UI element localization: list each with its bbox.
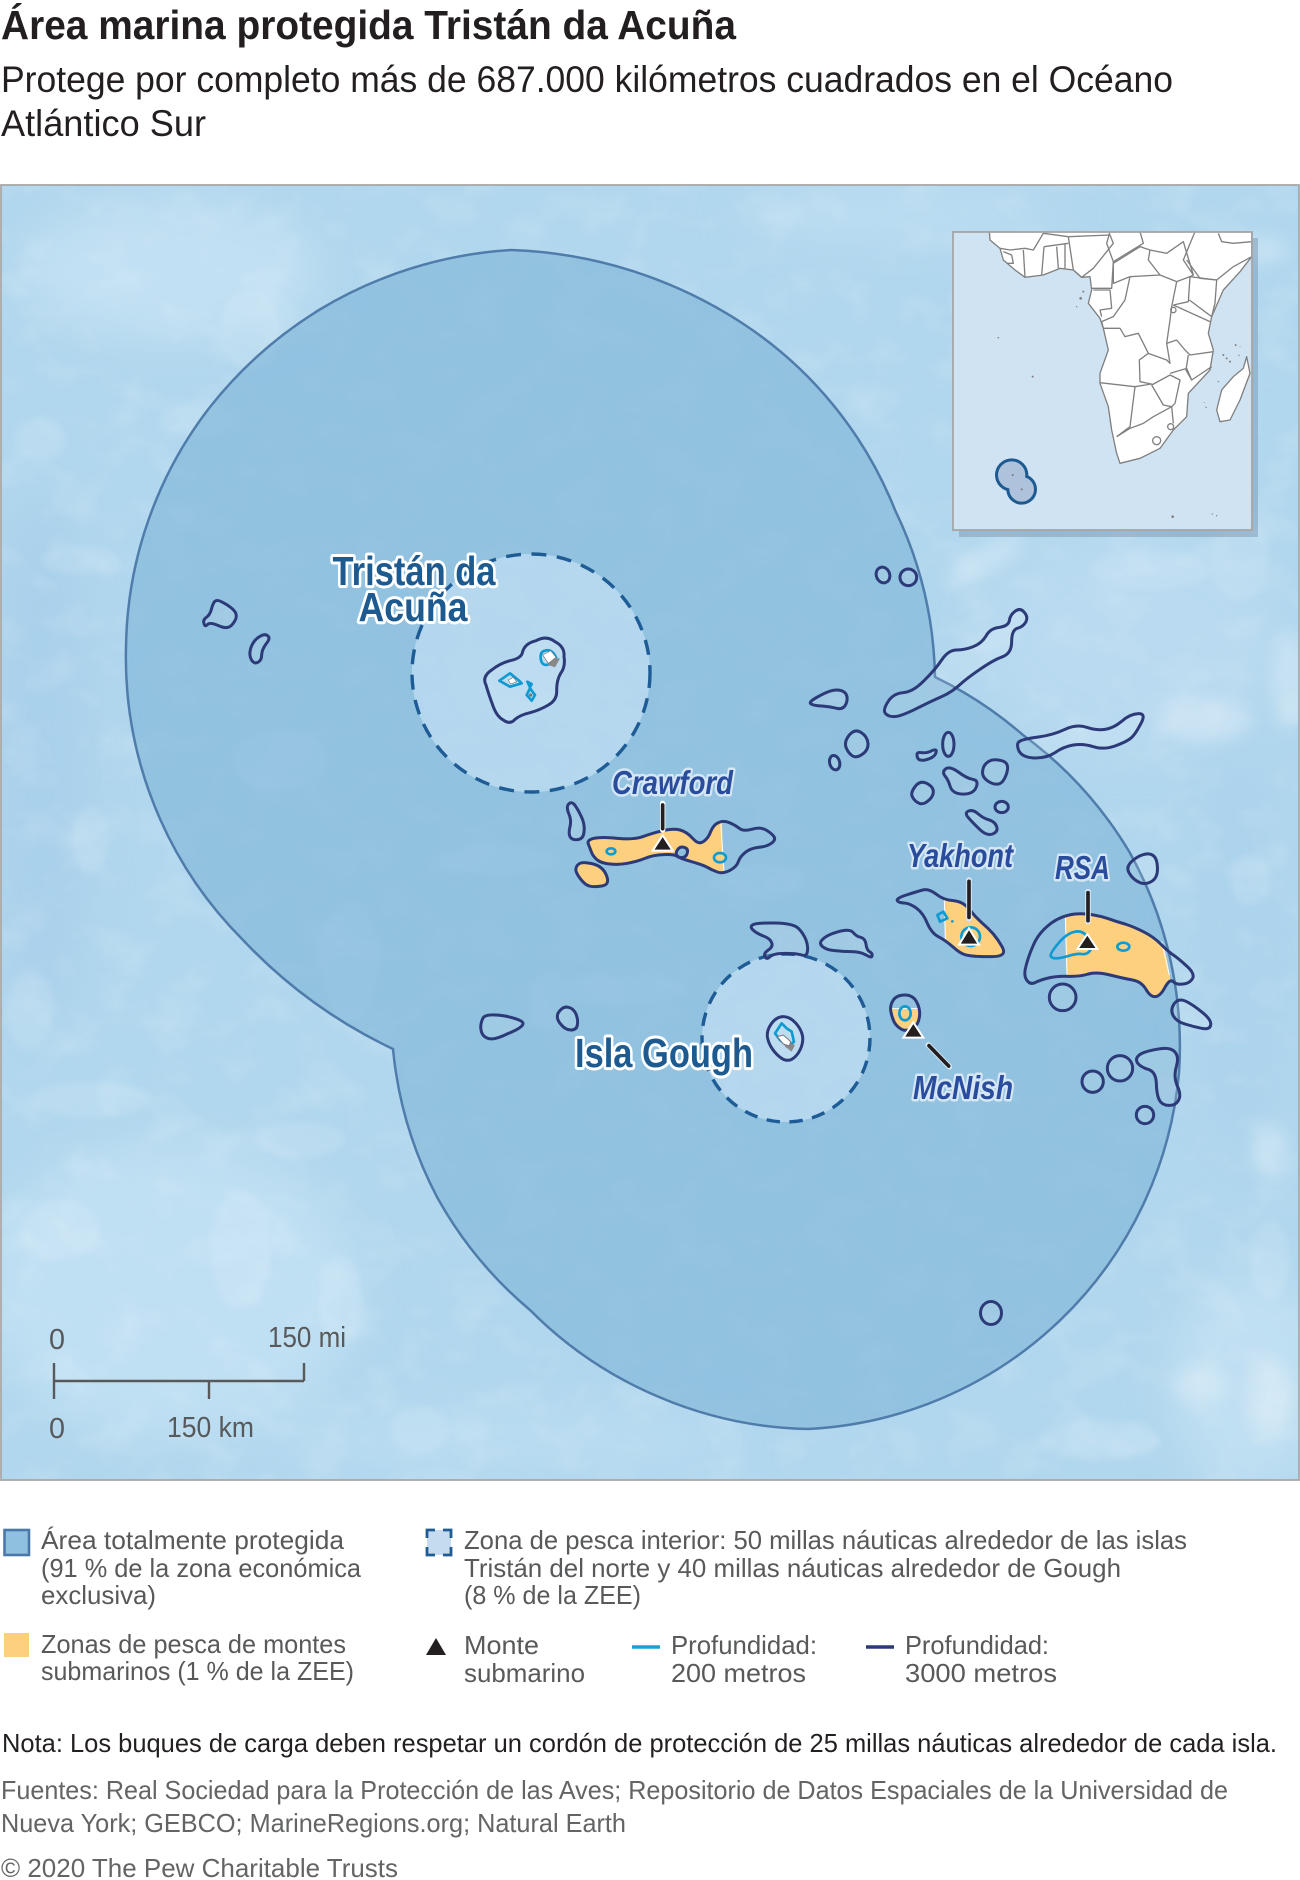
scale bar: 0: [49, 1413, 65, 1445]
legend: [4, 1525, 1187, 1688]
country borders: [1000, 232, 1252, 445]
legend: seamount: Monte: [464, 1630, 539, 1660]
inner fishing zone: Tristan: [412, 554, 650, 792]
legend: fully protected area: Área totalmente protegida: [41, 1525, 345, 1555]
legend: seamount: [426, 1630, 585, 1688]
Tristan da Cunha protected area on inset: [995, 458, 1037, 505]
legend: seamount: submarino: [464, 1658, 585, 1688]
Africa: [989, 232, 1252, 463]
legend: interior fishing zone: Tristán del norte y 40 millas náuticas alrededor de Gough: [464, 1553, 1121, 1583]
seamount marker: RSA: [1077, 892, 1097, 949]
inner fishing zone: Gough: [702, 954, 870, 1122]
Madagascar: [1217, 357, 1250, 422]
inset locator map: [953, 232, 1258, 537]
title: Área marina protegida Tristán da Acuña: [1, 2, 737, 48]
legend: fully protected area: (91 % de la zona económica: [41, 1553, 362, 1583]
scale bar: 150 km: [167, 1412, 254, 1444]
label: Tristán da Acuña: [332, 548, 497, 630]
scale bar: 150 mi: [268, 1322, 346, 1354]
label: Tristán da Acuña: Acuña: [358, 584, 469, 630]
note: Nota: Los buques de carga deben respetar un cordón de protección de 25 millas náuticas alrededor de cada isla.: [2, 1728, 1277, 1758]
label: Isla Gough: Isla Gough: [575, 1030, 753, 1076]
legend: fully protected area: [4, 1525, 362, 1610]
legend: seamount fishing zones: Zonas de pesca de montes: [41, 1629, 346, 1659]
legend: depth 3000 metres: 3000 metros: [905, 1658, 1057, 1688]
seamount marker: Yakhont: [959, 880, 979, 945]
sources: [1, 1775, 1228, 1838]
seamount: far western: [481, 1015, 523, 1039]
scale bar: [49, 1322, 346, 1445]
bathymetry: north-east seamount chains: [810, 565, 1157, 883]
legend: fully protected area: exclusiva): [41, 1580, 156, 1610]
legend: depth 200 metres: [632, 1630, 817, 1688]
legend: depth 3000 metres: Profundidad:: [905, 1630, 1049, 1660]
small islands: [997, 291, 1240, 518]
legend: seamount fishing zones: [4, 1629, 354, 1686]
legend: interior fishing zone: Zona de pesca interior: 50 millas náuticas alrededor de las islas: [464, 1525, 1187, 1555]
protected area (EEZ): [126, 250, 1180, 1429]
legend: seamount fishing zones: submarinos (1 % de la ZEE): [41, 1656, 354, 1686]
subtitle: Protege por completo más de 687.000 kilómetros cuadrados en el Océano: [1, 59, 1173, 100]
label: McNish: McNish: [913, 1069, 1013, 1106]
seamount marker: Crawford: [653, 803, 673, 851]
sources: Fuentes: Real Sociedad para la Protección de las Aves; Repositorio de Datos Espaciales de la Universidad de: [1, 1775, 1228, 1805]
label: RSA: RSA: [1055, 849, 1110, 886]
legend: interior fishing zone: [427, 1525, 1187, 1610]
label: Crawford: Crawford: [612, 764, 734, 801]
bathymetry: Tristan group and western seamounts: [204, 600, 564, 722]
seamount marker: McNish: [903, 1022, 949, 1067]
label: Tristán da Acuña: Tristán da: [332, 548, 497, 594]
panel: map: [0, 185, 1300, 1490]
bathymetry: central seamounts near Crawford and Gough: [557, 803, 872, 1060]
legend: depth 200 metres: 200 metros: [671, 1658, 806, 1688]
subtitle: Atlántico Sur: [1, 103, 206, 144]
bathymetry: Yakhont, RSA and McNish: [891, 890, 1211, 1124]
legend: interior fishing zone: (8 % de la ZEE): [464, 1580, 641, 1610]
subtitle: [1, 59, 1173, 144]
legend: depth 3000 metres: [866, 1630, 1057, 1688]
scale bar: 0: [49, 1324, 65, 1356]
label: Yakhont: Yakhont: [907, 837, 1015, 874]
legend: depth 200 metres: Profundidad:: [671, 1630, 817, 1660]
seamount: southern: [980, 1302, 1002, 1324]
sources: Nueva York; GEBCO; MarineRegions.org; Natural Earth: [1, 1808, 626, 1838]
